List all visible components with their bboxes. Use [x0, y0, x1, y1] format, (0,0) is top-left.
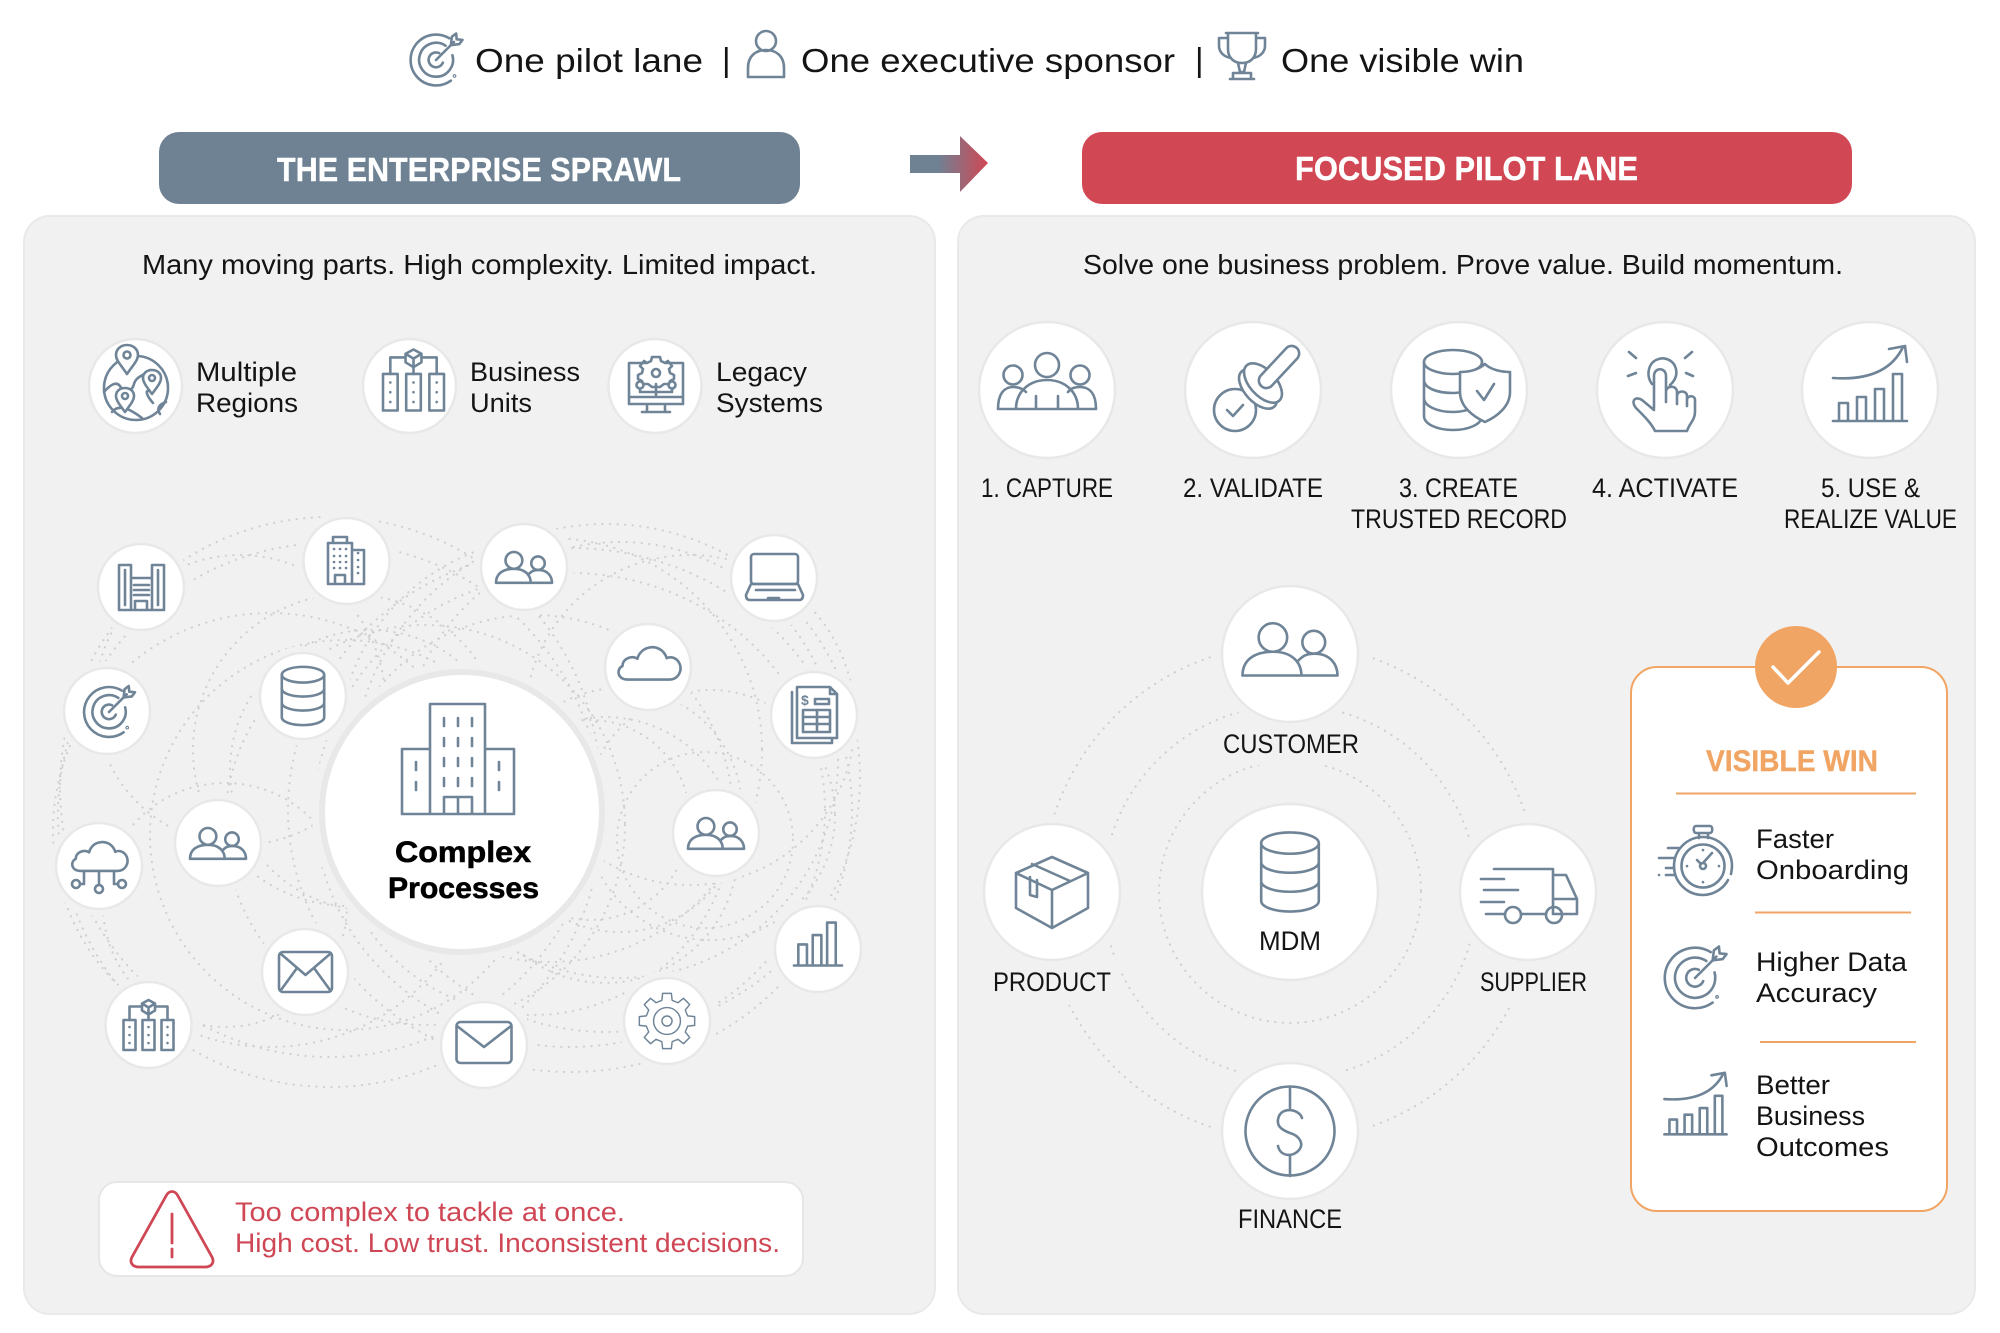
node: database [260, 653, 346, 739]
node: mail [441, 1002, 527, 1088]
text: one executive sponsor: One executive sponsor [801, 42, 1175, 79]
arrow: sprawl to pilot lane [910, 136, 988, 192]
step 1: capture [979, 322, 1115, 503]
node: gear [624, 978, 710, 1064]
node: team [175, 800, 261, 886]
step 2: validate: 2. VALIDATE [1183, 473, 1323, 503]
callout: warning: Too complex to tackle at once. [235, 1197, 625, 1227]
center circle: complex processes: Complex [395, 836, 531, 869]
node: product [984, 824, 1120, 997]
heading: focused pilot lane: FOCUSED PILOT LANE [1295, 150, 1638, 187]
benefit: better business outcomes: Outcomes [1756, 1132, 1889, 1162]
node: target [64, 668, 150, 754]
callout: warning: High cost. Low trust. Inconsistent decisions. [235, 1228, 780, 1258]
top strip: pilot principles [411, 31, 1524, 85]
heading: the enterprise sprawl: THE ENTERPRISE SPRAWL [277, 151, 681, 188]
callout: warning [99, 1182, 803, 1276]
text: one visible win: One visible win [1281, 42, 1524, 79]
heading: focused pilot lane [1082, 132, 1852, 204]
separator: | [722, 41, 731, 78]
dollar sign on invoice: $ [801, 692, 809, 708]
item: multiple regions: Multiple [196, 357, 297, 387]
node: team [481, 524, 567, 610]
node: supplier: SUPPLIER [1480, 967, 1587, 997]
icon: target [411, 34, 462, 85]
node: tower [304, 518, 390, 604]
subtitle: many moving parts: Many moving parts. High complexity. Limited impact. [142, 249, 817, 280]
node: finance: FINANCE [1238, 1204, 1342, 1234]
subtitle: solve one business problem: Solve one business problem. Prove value. Build momentum. [1083, 249, 1843, 280]
item: business units: Business [470, 357, 580, 387]
node: product: PRODUCT [993, 967, 1111, 997]
node: envelope [262, 929, 348, 1015]
benefit: better business outcomes: Better [1756, 1070, 1830, 1100]
node: laptop [731, 535, 817, 621]
item: legacy systems [608, 339, 823, 433]
panel: focused pilot lane [958, 216, 1975, 1314]
benefit: better business outcomes [1664, 1070, 1889, 1162]
item: business units [363, 339, 580, 433]
node: organisation units [106, 982, 192, 1068]
step 5: use and realize value: REALIZE VALUE [1784, 504, 1957, 534]
center circle: complex processes: Processes [388, 872, 539, 905]
heading: visible win: VISIBLE WIN [1706, 745, 1878, 778]
benefit: faster onboarding [1659, 824, 1909, 895]
panel: enterprise sprawl [24, 216, 935, 1314]
step 3: create trusted record: TRUSTED RECORD [1351, 504, 1567, 534]
separator: | [1195, 41, 1204, 78]
step 5: use and realize value: 5. USE & [1821, 473, 1920, 503]
item: multiple regions [89, 339, 298, 433]
item: multiple regions: Regions [196, 388, 298, 418]
step 4: activate: 4. ACTIVATE [1592, 473, 1738, 503]
benefit: higher data accuracy: Higher Data [1756, 947, 1908, 977]
step 4: activate [1592, 322, 1738, 503]
node: cloud network [56, 823, 142, 909]
node: cloud [605, 624, 691, 710]
step 3: create trusted record: 3. CREATE [1399, 473, 1518, 503]
item: business units: Units [470, 388, 532, 418]
item: legacy systems: Systems [716, 388, 823, 418]
item: legacy systems: Legacy [716, 357, 808, 387]
badge: check mark [1755, 626, 1837, 708]
diagram: MDM hub [974, 576, 1606, 1234]
step 5: use and realize value [1784, 322, 1957, 534]
node: office block [98, 544, 184, 630]
benefit: higher data accuracy [1665, 946, 1908, 1008]
node: supplier [1460, 824, 1596, 997]
text: one pilot lane: One pilot lane [475, 42, 703, 79]
node: customer: CUSTOMER [1223, 729, 1359, 759]
diagram: complex process web [49, 511, 868, 1095]
node: customer [1222, 586, 1359, 759]
icon: headquarters building [402, 704, 514, 814]
benefit: better business outcomes: Business [1756, 1101, 1865, 1131]
benefit: faster onboarding: Faster [1756, 824, 1834, 854]
step 2: validate [1183, 322, 1323, 503]
card: visible win [1631, 626, 1947, 1211]
node: MDM core [1202, 804, 1378, 980]
node: invoice [771, 672, 857, 758]
step 1: capture: 1. CAPTURE [981, 473, 1113, 503]
benefit: higher data accuracy: Accuracy [1756, 978, 1878, 1008]
step 3: create trusted record [1351, 322, 1567, 534]
icon: trophy [1219, 33, 1265, 79]
icon: warning triangle [131, 1192, 213, 1267]
heading: the enterprise sprawl [159, 132, 800, 204]
icon: person [748, 31, 784, 77]
node: bar chart [775, 906, 861, 992]
node: finance [1222, 1063, 1358, 1234]
benefit: faster onboarding: Onboarding [1756, 855, 1909, 885]
center circle: complex processes [322, 672, 602, 952]
node: MDM core: MDM [1259, 926, 1321, 956]
node: team [673, 790, 759, 876]
